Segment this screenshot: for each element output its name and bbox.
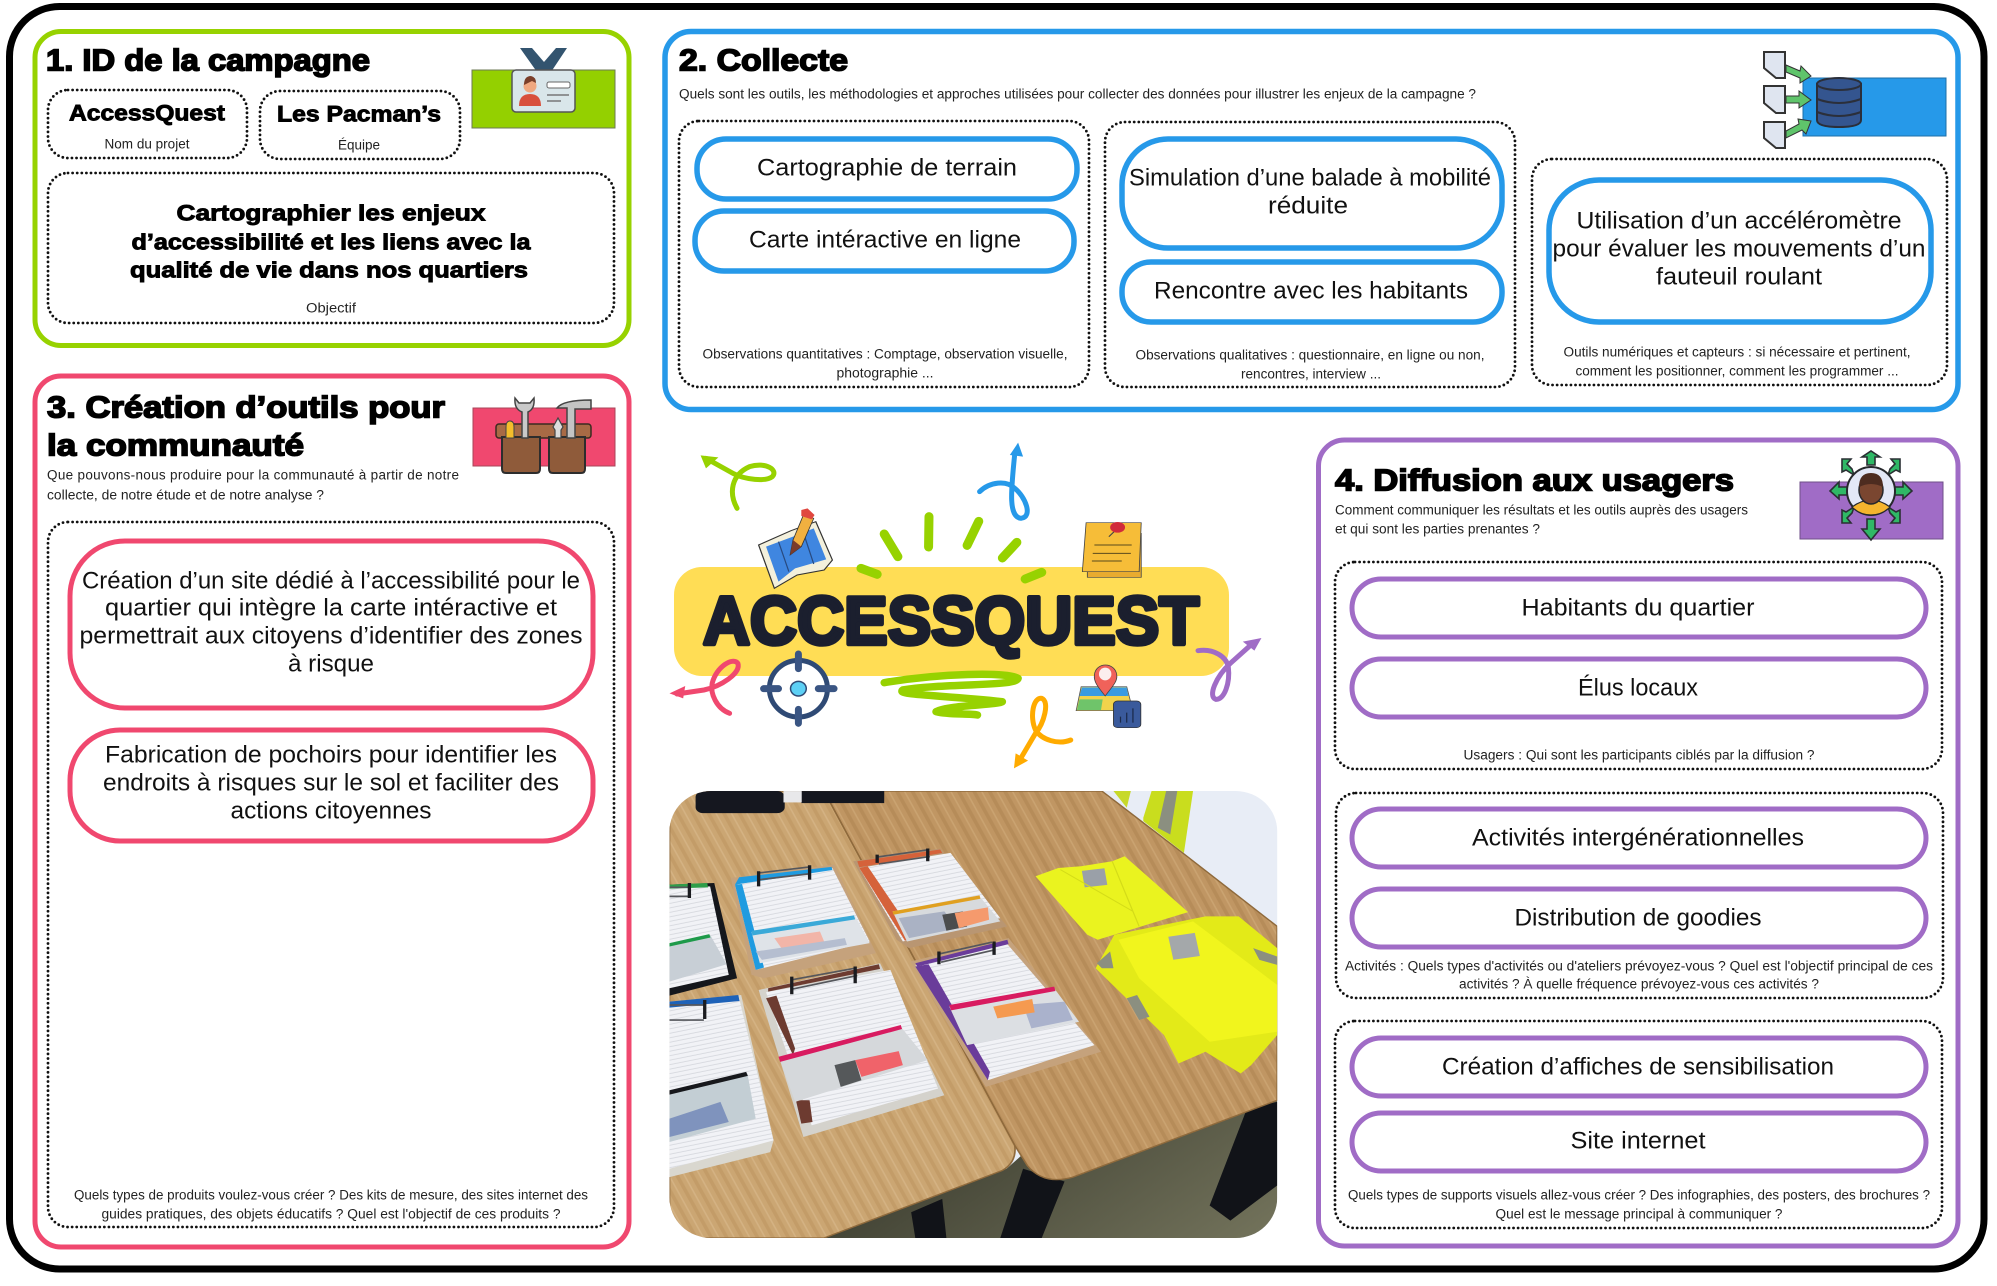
dark bag [696, 791, 884, 813]
pill: Utilisation d’un accéléromètre [1576, 208, 1902, 234]
intro question: Quels sont les outils, les méthodologies et approches utilisées pour collecter des données pour illustrer les enjeux de la campagne ? [679, 86, 1476, 102]
pill: permettrait aux citoyens d’identifier des zones [80, 622, 582, 650]
icon: map and pencil [759, 508, 832, 588]
field: nom du projet [48, 90, 247, 158]
caption: guides pratiques, des objets éducatifs ? Quel est l'objectif de ces produits ? [102, 1206, 560, 1222]
pill [70, 730, 593, 841]
caption: Outils numériques et capteurs : si nécessaire et pertinent, [1564, 344, 1910, 360]
intro question: Que pouvons-nous produire pour la communauté à partir de notre [47, 468, 459, 482]
scribble: green underline [884, 674, 1018, 715]
field: équipe [260, 91, 460, 159]
pill: endroits à risques sur le sol et faciliter des [103, 770, 559, 796]
arrow: blue [980, 443, 1027, 518]
field: nom du projet: AccessQuest [69, 100, 226, 126]
icon: target [764, 654, 834, 723]
yellow banner [674, 567, 1229, 676]
caption: Observations quantitatives : Comptage, observation visuelle, [702, 346, 1068, 362]
heading: 4. Diffusion aux usagers [1335, 462, 1734, 498]
clipboard: green [669, 883, 737, 996]
pill: Simulation d’une balade à mobilité [1129, 164, 1491, 192]
field: équipe: Les Pacman’s [277, 102, 441, 126]
pill: quartier qui intègre la carte intéractive et [105, 594, 557, 622]
panel: 3. Création d'outils [35, 376, 629, 1247]
vest stack 2 [1096, 916, 1277, 1074]
pill [695, 211, 1074, 271]
pill: Activités intergénérationnelles [1472, 824, 1804, 852]
pill [1122, 139, 1502, 248]
field: nom du projet: Nom du projet [104, 136, 190, 152]
vest stack 1 [1036, 856, 1188, 940]
group: usagers [1335, 562, 1942, 769]
group: outils numériques [1532, 159, 1947, 385]
caption [702, 346, 1068, 380]
table legs [911, 1102, 1277, 1238]
pill: actions citoyennes [230, 798, 432, 824]
group: observations qualitatives [1105, 122, 1515, 387]
panel: 1. ID de la campagne [35, 32, 629, 346]
intro question: collecte, de notre étude et de notre analyse ? [47, 488, 324, 502]
caption: comment les positionner, comment les programmer ... [1576, 364, 1898, 378]
caption: Quel est le message principal à communiquer ? [1496, 1206, 1782, 1222]
panel: 4. Diffusion aux usagers [1318, 440, 1958, 1246]
pill: réduite [1268, 192, 1348, 220]
heading: 1. ID de la campagne [46, 42, 370, 78]
caption: Quels types de supports visuels allez-vous créer ? Des infographies, des posters, des brochures ? [1348, 1188, 1930, 1202]
group: produits [48, 522, 614, 1227]
field: objectif: Objectif [306, 300, 356, 316]
tables [669, 791, 1277, 1238]
panel border [35, 32, 629, 346]
field: objectif [48, 173, 614, 323]
caption [74, 1188, 588, 1222]
logo: AccessQuest banner with doodles [669, 443, 1261, 768]
group: supports visuels [1335, 1021, 1942, 1228]
pill: Création d’un site dédié à l’accessibilité pour le [82, 568, 580, 594]
pill [697, 139, 1077, 199]
pill: Cartographie de terrain [757, 154, 1017, 182]
caption: photographie ... [836, 366, 934, 380]
caption [1564, 344, 1910, 378]
pill: Rencontre avec les habitants [1154, 278, 1468, 304]
icon: sticky note [1082, 522, 1141, 577]
pill [1352, 659, 1926, 717]
icon: person with outward arrows [1800, 451, 1943, 540]
rays: green [861, 517, 1042, 579]
icon: ID badge [472, 48, 615, 128]
clipboard: blue [731, 865, 876, 978]
intro question [47, 468, 459, 502]
logo wordmark: ACCESSQUEST [703, 583, 1199, 659]
panel: 2. Collecte [665, 32, 1958, 410]
caption: Quels types de produits voulez-vous créer ? Des kits de mesure, des sites internet des [74, 1188, 588, 1202]
pill: Distribution de goodies [1514, 904, 1762, 932]
pill: Élus locaux [1578, 674, 1698, 702]
clipboard: purple [910, 938, 1101, 1087]
panel border [665, 32, 1958, 410]
arrow: purple [1198, 638, 1261, 699]
pill [70, 541, 593, 708]
intro question [1335, 502, 1748, 536]
panel border [35, 376, 629, 1247]
caption [1348, 1188, 1930, 1222]
pill [1352, 1113, 1926, 1171]
panel border [1318, 440, 1958, 1246]
pill: fauteuil roulant [1656, 264, 1822, 290]
pill [1352, 579, 1926, 637]
pill [1549, 180, 1931, 322]
caption: Activités : Quels types d'activités ou d'ateliers prévoyez-vous ? Quel est l'objectif principal de ces [1345, 958, 1933, 974]
field: équipe: Équipe [338, 138, 380, 152]
pill: Carte intéractive en ligne [749, 226, 1021, 254]
field: objectif: Cartographier les enjeux [176, 200, 486, 226]
caption: Observations qualitatives : questionnaire, en ligne ou non, [1136, 348, 1484, 362]
field: objectif: d’accessibilité et les liens avec la [132, 230, 531, 254]
heading: 3. Création d’outils pour [47, 390, 445, 424]
photo: clipboards and high-visibility vests on a table [669, 791, 1278, 1238]
arrow: green [701, 455, 774, 508]
pill: Site internet [1570, 1128, 1706, 1154]
doodles [670, 442, 1262, 768]
pill [1352, 809, 1926, 867]
heading: 2. Collecte [679, 42, 848, 78]
background vests [1113, 791, 1193, 853]
caption: activités ? À quelle fréquence prévoyez-vous ces activités ? [1459, 976, 1819, 992]
pill: Habitants du quartier [1522, 594, 1755, 622]
field: objectif: qualité de vie dans nos quartiers [130, 258, 528, 282]
wall and floor [826, 791, 1278, 1238]
caption [1345, 958, 1933, 992]
group: activités [1336, 793, 1943, 998]
pill [1352, 889, 1926, 947]
arrow: pink [669, 661, 738, 713]
caption: rencontres, interview ... [1241, 366, 1381, 382]
pill [1122, 262, 1502, 322]
heading: la communauté [47, 428, 304, 462]
clipboard: brown [759, 963, 944, 1137]
intro question: Comment communiquer les résultats et les outils auprès des usagers [1335, 502, 1748, 518]
pill: pour évaluer les mouvements d’un [1552, 236, 1926, 262]
pill: à risque [288, 650, 374, 678]
intro question: et qui sont les parties prenantes ? [1335, 522, 1540, 536]
pill: Fabrication de pochoirs pour identifier les [105, 742, 557, 768]
clipboard: orange [853, 849, 1007, 948]
pill [1352, 1038, 1926, 1096]
caption [1136, 348, 1484, 382]
icon: map pin and chart [1076, 665, 1141, 728]
icon: tool belt [473, 398, 615, 473]
group: observations quantitatives [679, 121, 1089, 387]
icon: documents to database [1764, 52, 1946, 148]
arrow: orange [1014, 698, 1071, 768]
pill: Création d’affiches de sensibilisation [1442, 1054, 1834, 1080]
clipboard: blue bottom-left [669, 995, 774, 1177]
caption: Usagers : Qui sont les participants ciblés par la diffusion ? [1464, 748, 1814, 762]
heading [47, 390, 445, 462]
